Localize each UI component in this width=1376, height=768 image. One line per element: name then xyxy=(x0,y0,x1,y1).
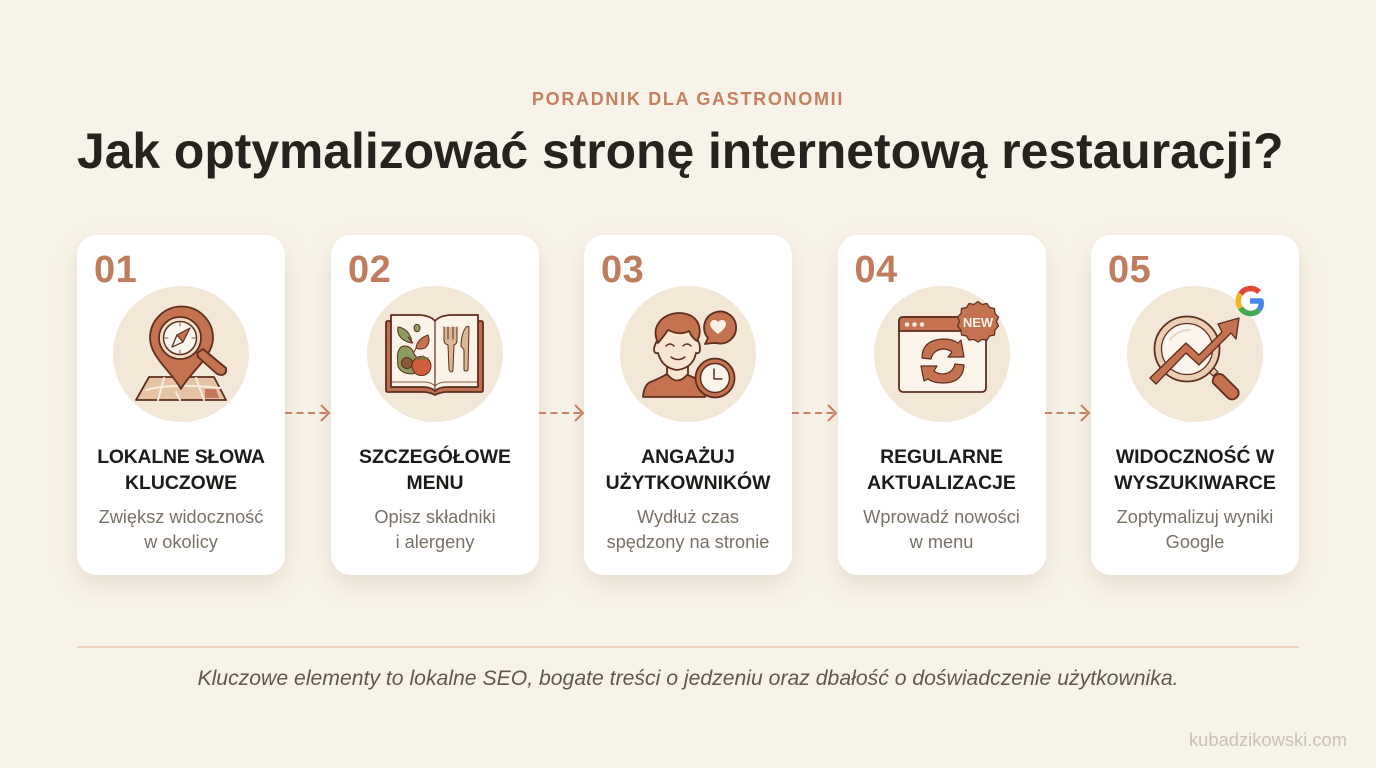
arrow 2 to 3 xyxy=(539,404,584,422)
step heading: LOKALNE SŁOWA xyxy=(97,446,265,468)
panel: step 4 xyxy=(838,235,1046,575)
panel: step 3 xyxy=(584,235,792,575)
panel: step 1 xyxy=(77,235,285,575)
arrow 3 to 4 xyxy=(792,404,838,422)
step description xyxy=(374,507,496,552)
step heading xyxy=(97,446,265,494)
step heading xyxy=(359,446,511,494)
step number 03: 03 xyxy=(601,249,644,291)
step description: w okolicy xyxy=(144,532,218,552)
step heading: REGULARNE xyxy=(880,446,1003,468)
step description: Zoptymalizuj wyniki xyxy=(1117,507,1273,527)
watermark: kubadzikowski.com xyxy=(1189,729,1347,750)
step description: Google xyxy=(1166,532,1224,552)
step description: Opisz składniki xyxy=(374,507,496,527)
step description: w menu xyxy=(910,532,973,552)
step heading: MENU xyxy=(406,472,464,494)
step description: i alergeny xyxy=(396,532,474,552)
step number 04: 04 xyxy=(854,249,898,291)
step heading: ANGAŻUJ xyxy=(641,446,735,468)
step heading: WIDOCZNOŚĆ W xyxy=(1116,446,1274,468)
step number 05: 05 xyxy=(1108,249,1151,291)
icon: smiling user with heart and clock xyxy=(620,286,756,422)
icon: open menu book xyxy=(367,286,503,422)
step heading xyxy=(606,446,770,494)
step number 01: 01 xyxy=(94,249,137,291)
step heading: WYSZUKIWARCE xyxy=(1114,472,1276,494)
icon: magnifier with growth arrow and Google logo xyxy=(1127,286,1264,422)
step heading: UŻYTKOWNIKÓW xyxy=(606,472,770,494)
step description: Wprowadź nowości xyxy=(863,507,1020,527)
title: Jak optymalizować stronę internetową restauracji? xyxy=(77,123,1284,179)
step description: spędzony na stronie xyxy=(607,532,769,552)
icon: browser window with refresh and NEW badge: NEW xyxy=(962,315,993,330)
panel: step 5 xyxy=(1091,235,1299,575)
Google G logo xyxy=(1238,289,1261,313)
step description xyxy=(863,507,1020,552)
step description xyxy=(1117,507,1273,552)
step heading xyxy=(1114,446,1276,494)
step number 02: 02 xyxy=(348,249,391,291)
arrow 1 to 2 xyxy=(285,404,330,422)
arrow 4 to 5 xyxy=(1045,404,1090,422)
footer summary: Kluczowe elementy to lokalne SEO, bogate treści o jedzeniu oraz dbałość o doświadczenie użytkownika. xyxy=(197,667,1179,690)
step heading: AKTUALIZACJE xyxy=(867,472,1016,494)
icon: browser window with refresh and NEW badge xyxy=(874,286,1010,422)
step heading: KLUCZOWE xyxy=(125,472,237,494)
icon: map pin with compass magnifier xyxy=(113,286,249,422)
step heading: SZCZEGÓŁOWE xyxy=(359,446,511,468)
step description xyxy=(607,507,769,552)
step description: Wydłuż czas xyxy=(637,507,739,527)
step description xyxy=(99,507,263,552)
step heading xyxy=(867,446,1016,494)
step description: Zwiększ widoczność xyxy=(99,507,263,527)
eyebrow heading: PORADNIK DLA GASTRONOMII xyxy=(532,89,844,109)
panel: step 2 xyxy=(331,235,539,575)
